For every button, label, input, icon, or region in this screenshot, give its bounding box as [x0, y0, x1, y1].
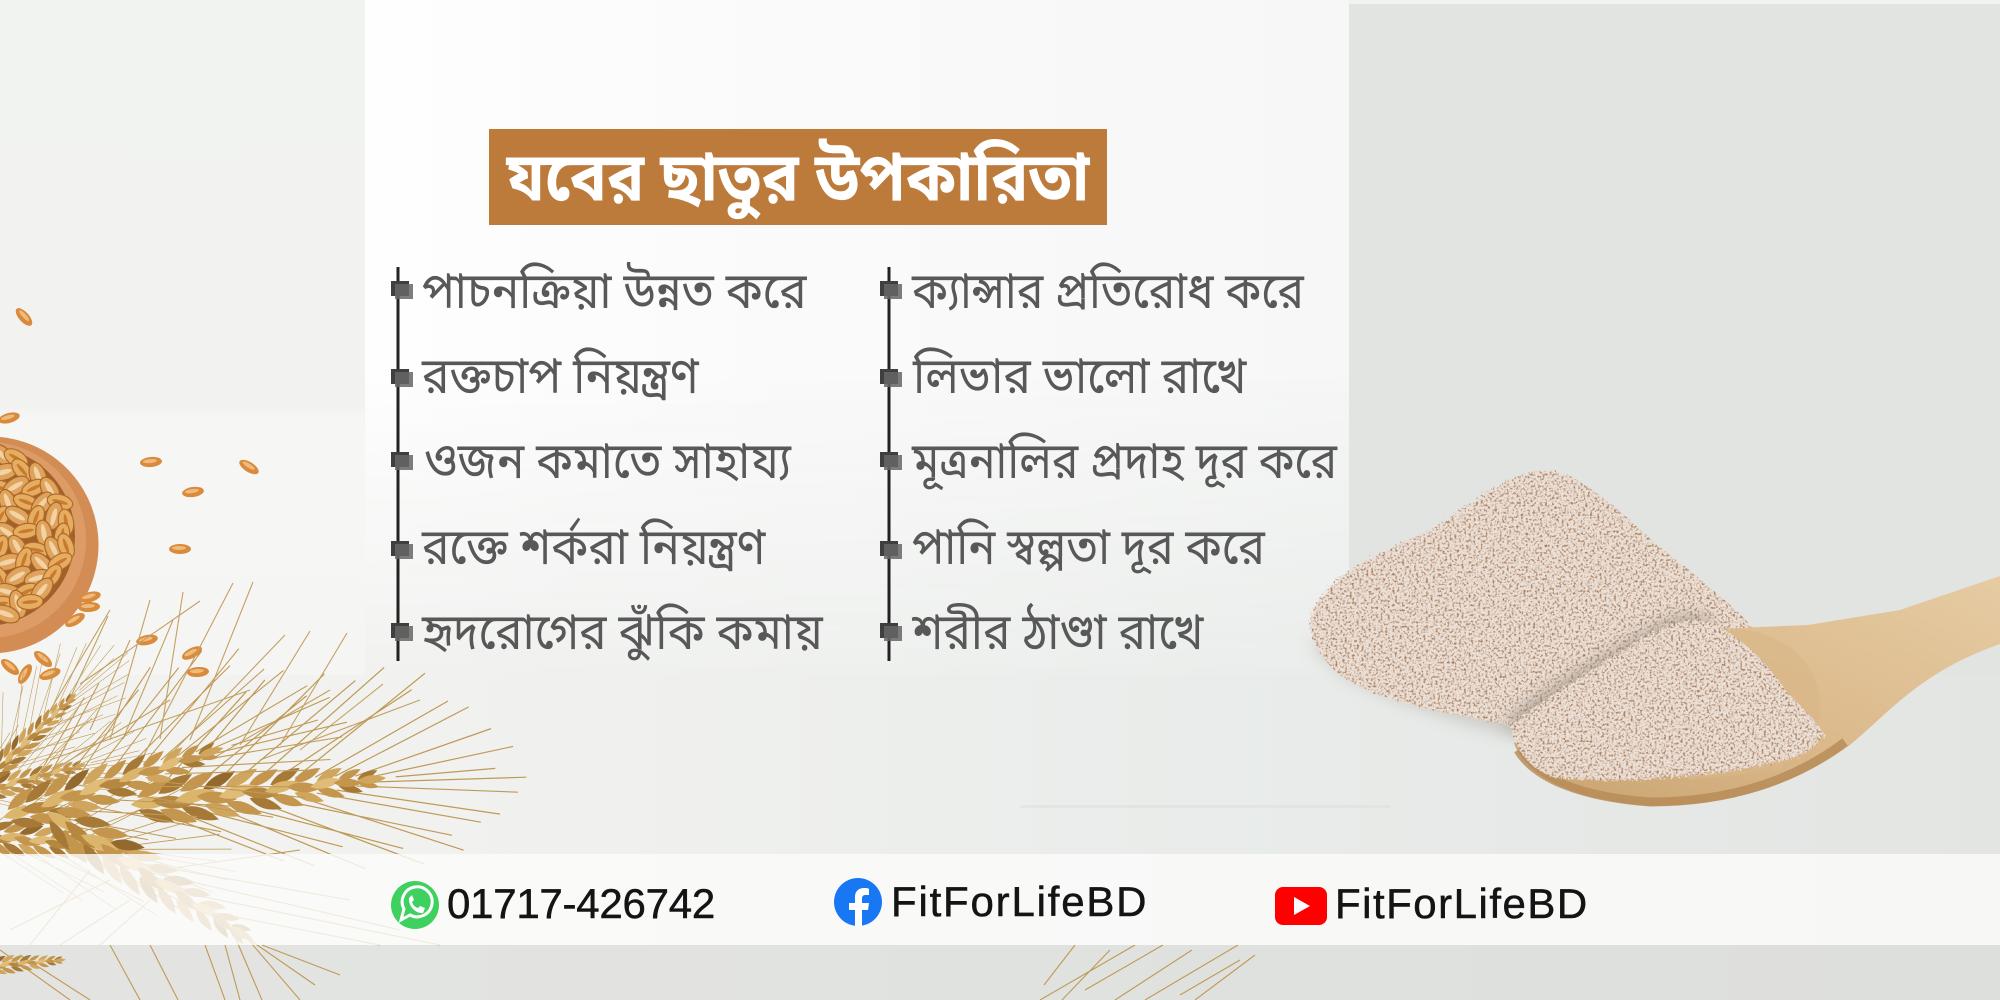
list timeline left	[391, 267, 413, 661]
flour pile	[1310, 471, 1770, 740]
background: grey right side	[1349, 0, 2000, 675]
wooden bowl of wheat grains	[0, 436, 98, 654]
background: white wood planks left	[0, 0, 365, 675]
list item: digestion: পাচনক্রিয়া উন্নত করে	[422, 262, 806, 329]
icon: whatsapp	[391, 881, 439, 929]
wheat ears and awns	[0, 582, 1255, 1000]
list item: water: পানি স্বল্পতা দূর করে	[912, 518, 1265, 585]
list item: blood pressure: রক্তচাপ নিয়ন্ত্রণ	[422, 347, 699, 414]
scattered wheat grains	[0, 305, 261, 686]
list item: cooling: শরীর ঠাণ্ডা রাখে	[912, 603, 1203, 670]
contact: facebook name: FitForLifeBD	[891, 878, 1148, 925]
list item: weight: ওজন কমাতে সাহায্য	[424, 432, 791, 499]
list item: urinary: মূত্রনালির প্রদাহ দূর করে	[912, 432, 1337, 499]
title: যবের ছাতুর উপকারিতা	[507, 139, 1089, 229]
list item: heart: হৃদরোগের ঝুঁকি কমায়	[422, 603, 823, 670]
icon: facebook	[834, 878, 882, 926]
contact strip	[0, 854, 2000, 945]
flour on spoon	[1505, 616, 1824, 780]
list timeline right	[880, 267, 902, 661]
icon: youtube	[1275, 887, 1327, 925]
list item: liver: লিভার ভালো রাখে	[913, 347, 1246, 414]
panel: translucent white text background	[365, 0, 1349, 570]
contact: phone number: 01717-426742	[447, 880, 715, 927]
list item: cancer: ক্যান্সার প্রতিরোধ করে	[912, 262, 1304, 329]
list item: blood sugar: রক্তে শর্করা নিয়ন্ত্রণ	[422, 518, 765, 585]
wooden spoon	[1514, 576, 2000, 806]
contact: youtube name: FitForLifeBD	[1335, 880, 1589, 927]
